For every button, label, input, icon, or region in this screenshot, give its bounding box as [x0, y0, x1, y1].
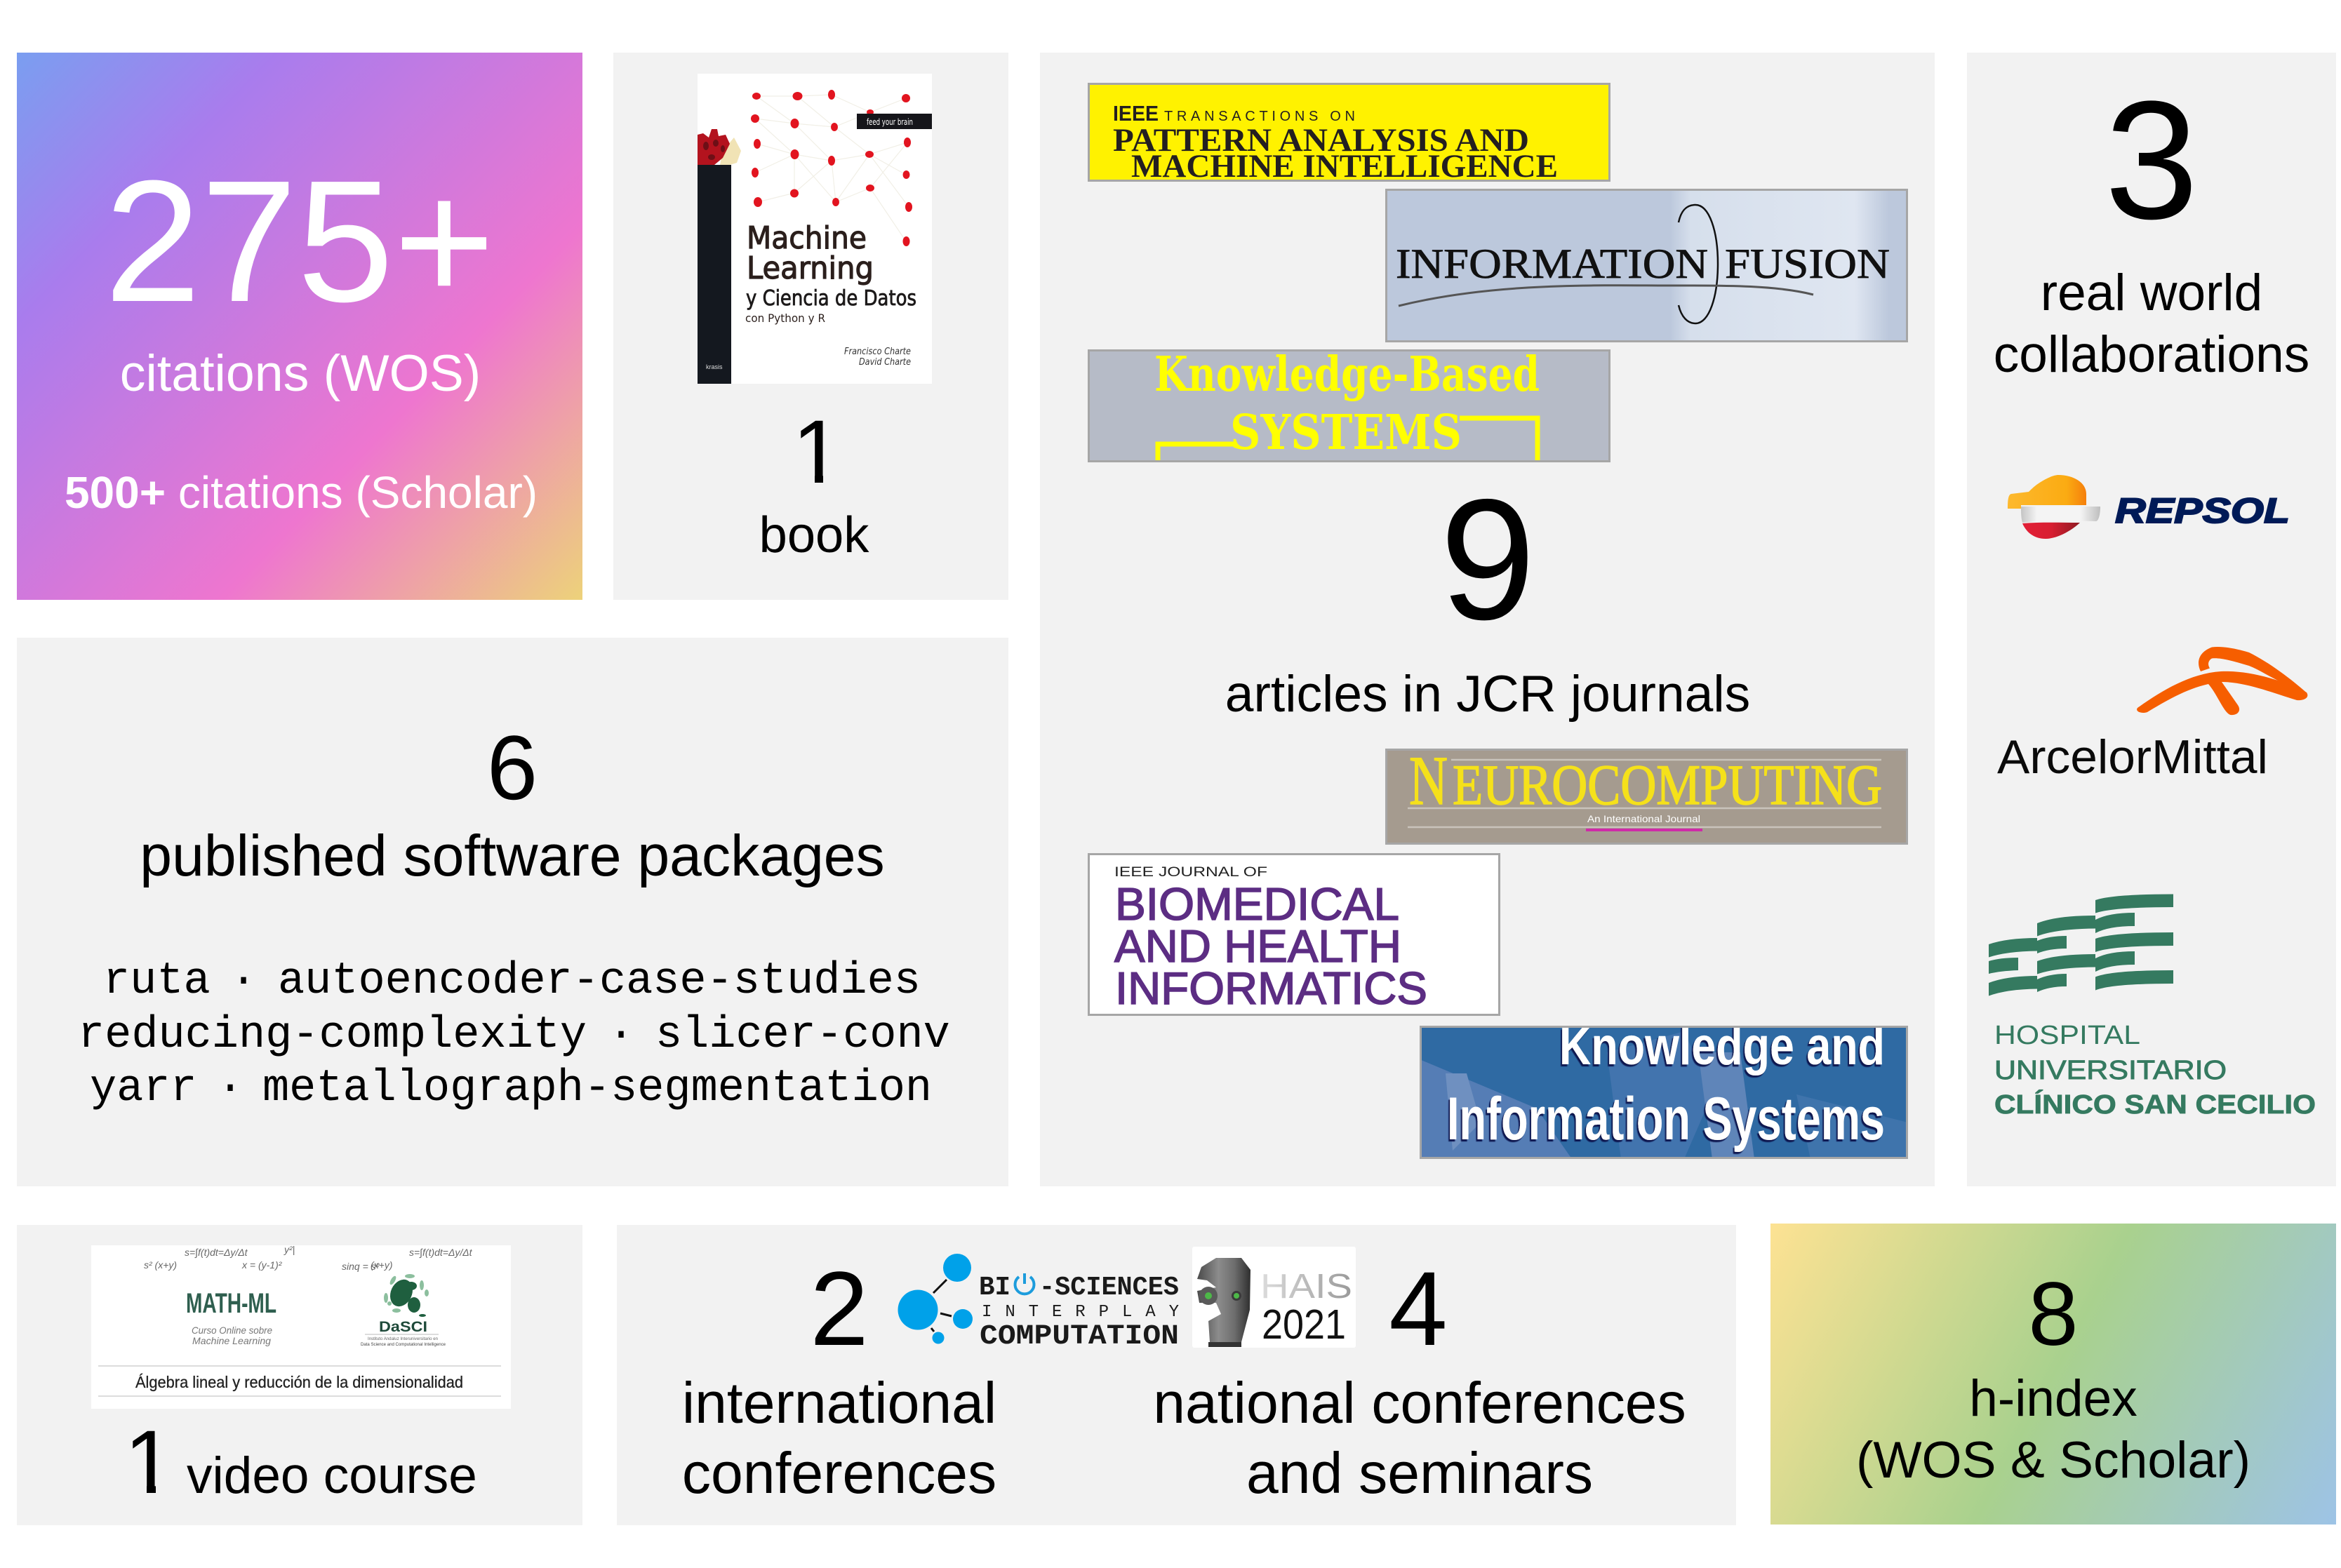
book count: 1: [792, 402, 842, 502]
journal logo: Biomedical and Health Informatics: IEEE JOURNAL OF: [1114, 865, 1267, 880]
journal logo: Biomedical and Health Informatics: BIOMEDICAL: [1115, 878, 1399, 930]
JCR label: articles in JCR journals: [1225, 665, 1750, 723]
h-index value: 8: [2028, 1264, 2079, 1365]
journal logo: TPAMI: [1089, 84, 1610, 185]
journal logo: Neurocomputing: An International Journal: [1587, 813, 1700, 824]
collaborations label: real world: [2041, 264, 2262, 321]
international conferences count: 2: [810, 1249, 869, 1367]
journal logo: Knowledge-Based Systems: [1089, 347, 1610, 462]
video course thumbnail: MATH-ML: [186, 1288, 276, 1319]
packages list: reducing-complexity: [78, 1010, 587, 1061]
logo: Hospital Universitario Clinico San Cecilio: [1989, 894, 2316, 1120]
logo: ArcelorMittal: [1997, 647, 2307, 784]
journal logo: Neurocomputing: [1387, 742, 1907, 843]
book cover: con Python y R: [745, 311, 825, 325]
logo: Bio-Sciences Interplay Computation: [898, 1254, 1179, 1353]
national conferences count: 4: [1389, 1249, 1448, 1367]
panel: real world collaborations: [1967, 53, 2336, 1186]
video course label: video course: [187, 1447, 477, 1504]
logo: ArcelorMittal: ArcelorMittal: [1997, 730, 2268, 784]
national conferences label: and seminars: [1246, 1441, 1593, 1506]
video course thumbnail: Instituto Andaluz Interuniversitario en: [368, 1337, 438, 1341]
journal logo: TPAMI: IEEE: [1113, 101, 1159, 126]
journal logo: TPAMI: TRANSACTIONS ON: [1164, 109, 1355, 124]
journal logo: Information Fusion: [1387, 189, 1907, 341]
packages list: ·: [608, 1010, 634, 1061]
panel: h-index: [1770, 1224, 2336, 1525]
video course thumbnail: sinq = s²: [342, 1261, 380, 1272]
journal logo: Knowledge-Based Systems: Knowledge-Based: [1154, 347, 1540, 403]
journal logo: Biomedical and Health Informatics: AND HEALTH: [1114, 920, 1401, 972]
book cover: Francisco Charte: [844, 347, 911, 357]
video course thumbnail: Curso Online sobre: [192, 1325, 272, 1336]
logo: HAIS 2021: 2021: [1262, 1301, 1346, 1348]
journal logo: Knowledge and Information Systems: Information Systems: [1447, 1085, 1885, 1153]
journal logo: Information Fusion: INFORMATION: [1396, 241, 1708, 287]
video course thumbnail: DaSCI: [379, 1319, 427, 1335]
logo: HAIS 2021: [1192, 1247, 1356, 1348]
logo: Bio-Sciences Interplay Computation: COMPUTATION: [980, 1321, 1179, 1353]
panel: citations: [17, 53, 582, 600]
logo: Bio-Sciences Interplay Computation: INTERPLAY: [982, 1303, 1179, 1322]
panel: conferences: [617, 1225, 1736, 1525]
panel: software packages: [17, 638, 1008, 1186]
book cover: Learning: [747, 250, 874, 286]
logo: Bio-Sciences Interplay Computation: BI: [979, 1273, 1011, 1303]
logo: Hospital Universitario Clinico San Cecilio: CLÍNICO SAN CECILIO: [1994, 1089, 2316, 1120]
international conferences label: [682, 1371, 996, 1506]
journal logo: Neurocomputing: EUROCOMPUTING: [1453, 753, 1882, 817]
logo: HAIS 2021: HAIS: [1260, 1268, 1352, 1306]
panel: journal articles: [1040, 53, 1935, 1186]
panel: video course: [17, 1225, 582, 1525]
packages heading: published software packages: [140, 824, 885, 888]
journal logo: Knowledge and Information Systems: Knowledge and: [1559, 1017, 1885, 1076]
journal logo: Biomedical and Health Informatics: INFORMATICS: [1115, 963, 1427, 1014]
book cover: krasis: [706, 363, 723, 370]
packages list: autoencoder-case-studies: [278, 956, 921, 1007]
logo: Hospital Universitario Clinico San Cecilio: HOSPITAL: [1994, 1021, 2140, 1050]
journal logo: Neurocomputing: N: [1409, 742, 1448, 819]
packages list: yarr: [90, 1064, 197, 1114]
JCR count: 9: [1440, 463, 1535, 655]
video course thumbnail: Machine Learning: [192, 1335, 271, 1346]
logo: Hospital Universitario Clinico San Cecilio: UNIVERSITARIO: [1994, 1056, 2227, 1085]
citations WOS label: citations (WOS): [120, 344, 481, 402]
journal logo: Knowledge-Based Systems: SYSTEMS: [1230, 405, 1462, 461]
video course thumbnail: Data Science and Computational Intelligence: [361, 1343, 446, 1347]
packages list: ·: [230, 956, 257, 1007]
book cover: David Charte: [859, 357, 911, 368]
video course thumbnail: x = (y-1)²: [241, 1259, 283, 1271]
international conferences label: conferences: [682, 1441, 996, 1506]
national conferences label: [1153, 1371, 1686, 1506]
book cover: y Ciencia de Datos: [746, 286, 916, 311]
logo: Repsol: REPSOL: [2115, 491, 2290, 530]
panel: book: [613, 53, 1008, 600]
journal logo: TPAMI: MACHINE INTELLIGENCE: [1131, 148, 1558, 185]
video course thumbnail: Álgebra lineal y reducción de la dimensionalidad: [135, 1373, 463, 1391]
journal logo: Information Fusion: FUSION: [1725, 241, 1890, 287]
journal logo: Knowledge and Information Systems: [1420, 1017, 1908, 1159]
citations number: 275+: [105, 145, 495, 338]
packages count: 6: [487, 716, 538, 819]
video course thumbnail: s=∫f(t)dt=Δy/Δt: [185, 1247, 248, 1259]
book cover: feed your brain: [867, 117, 913, 127]
video course thumbnail: s² (x+y): [144, 1259, 177, 1271]
national conferences label: national conferences: [1153, 1371, 1686, 1435]
journal logo: Biomedical and Health Informatics: [1089, 855, 1499, 1014]
logo: Bio-Sciences Interplay Computation: -SCIENCES: [1039, 1273, 1179, 1303]
video course thumbnail: [91, 1244, 511, 1409]
collaborations label line 2: collaborations: [1994, 326, 2309, 383]
book cover: Machine: [747, 220, 867, 256]
h-index label: h-index: [1969, 1370, 2137, 1427]
h-index label: [1856, 1370, 2250, 1489]
video course thumbnail: y²|: [284, 1244, 295, 1255]
packages list: slicer-conv: [655, 1010, 950, 1061]
packages list: ·: [217, 1064, 244, 1114]
h-index label: (WOS & Scholar): [1856, 1431, 2250, 1489]
logo: Repsol: [2008, 475, 2290, 539]
journal logo: TPAMI: PATTERN ANALYSIS AND: [1113, 122, 1529, 159]
book cover: [698, 74, 932, 384]
video course thumbnail: s=∫f(t)dt=Δy/Δt: [409, 1247, 473, 1259]
book label: book: [759, 507, 869, 563]
international conferences label: international: [682, 1371, 996, 1435]
video course thumbnail: (x+y): [371, 1259, 393, 1271]
collaborations count: 3: [2105, 66, 2199, 254]
packages list: ruta: [103, 956, 211, 1007]
packages list: metallograph-segmentation: [262, 1064, 932, 1114]
citations Scholar label: 500+ citations (Scholar): [65, 467, 538, 518]
video course count: 1: [124, 1412, 174, 1513]
